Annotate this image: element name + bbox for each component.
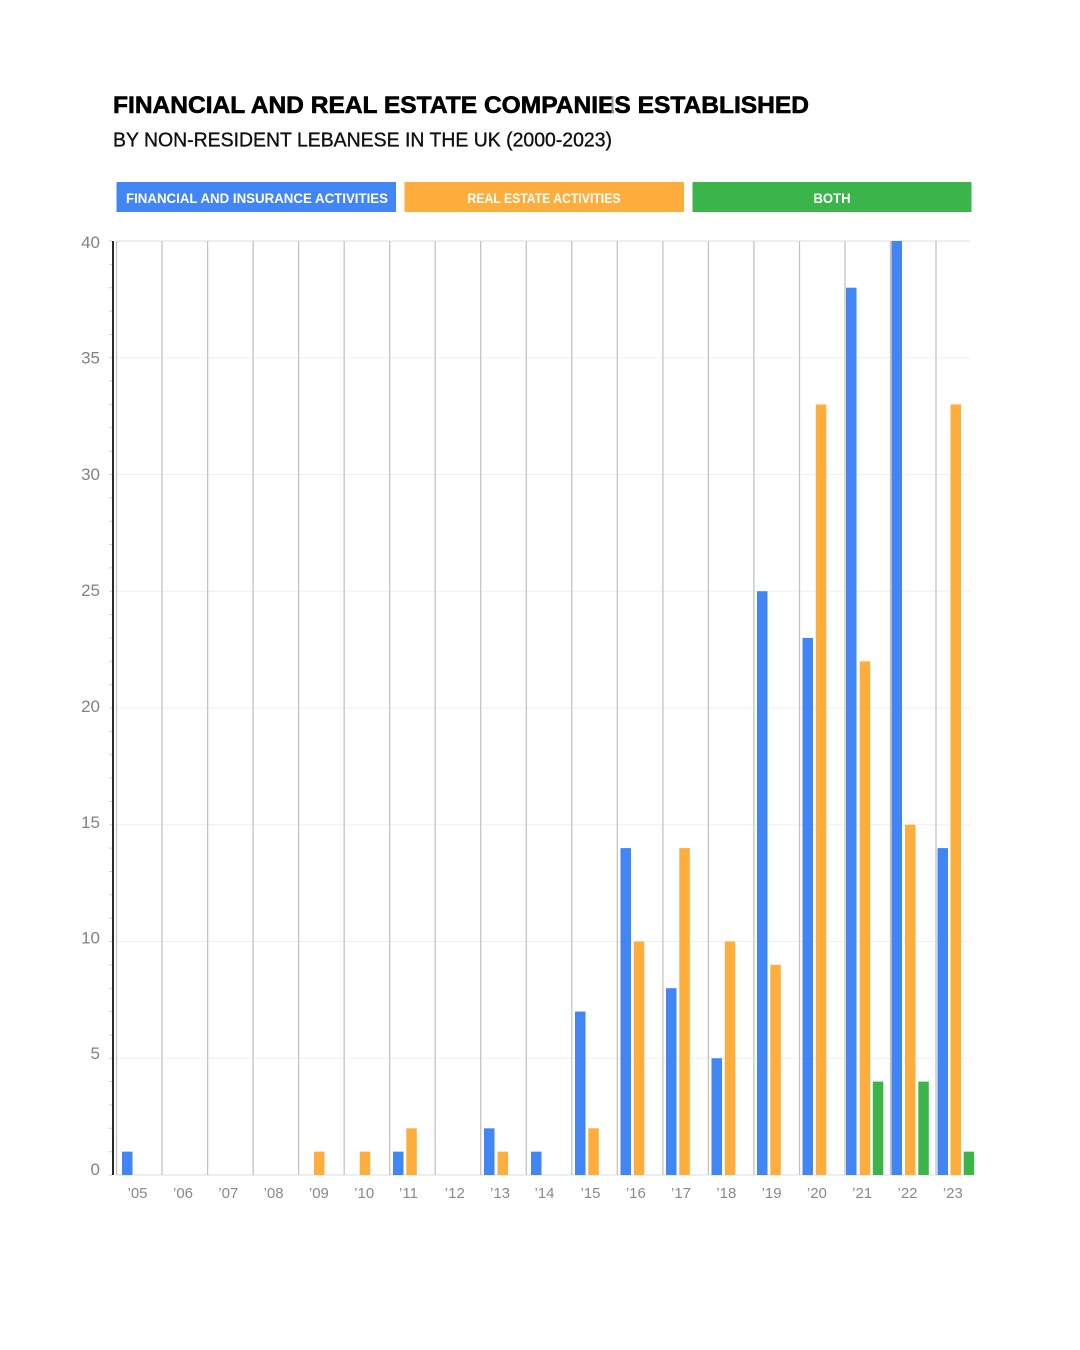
bars: 2013 xyxy=(484,1128,508,1175)
bars: 2016 xyxy=(620,848,644,1175)
x axis labels: ’18 xyxy=(716,1185,736,1202)
x axis labels: ’13 xyxy=(490,1185,510,1202)
x axis labels: ’19 xyxy=(762,1185,782,1202)
x axis labels xyxy=(127,1185,963,1202)
x axis labels: ’05 xyxy=(127,1185,148,1202)
bars: 2021 xyxy=(846,288,883,1175)
bars: 2011 xyxy=(393,1128,417,1175)
horizontal grid lines xyxy=(116,241,970,1175)
legend: real estate activities: REAL ESTATE ACTIVITIES xyxy=(468,191,620,206)
y axis labels: 35 xyxy=(81,348,100,368)
subtitle: BY NON-RESIDENT LEBANESE IN THE UK (2000-2023) xyxy=(113,130,612,152)
bar chart xyxy=(81,233,974,1202)
title: FINANCIAL AND REAL ESTATE COMPANIES ESTABLISHED xyxy=(113,92,809,119)
y axis labels: 5 xyxy=(91,1044,100,1063)
bars: 2009 xyxy=(314,1152,324,1175)
bars: 2014 xyxy=(531,1152,542,1175)
vertical grid lines xyxy=(116,241,936,1175)
legend: real estate activities xyxy=(404,182,684,212)
y axis labels: 40 xyxy=(81,233,100,252)
y axis labels xyxy=(81,233,100,1179)
title glitch mark xyxy=(612,96,614,113)
x axis labels: ’20 xyxy=(807,1185,827,1202)
x axis labels: ’11 xyxy=(399,1185,418,1202)
y axis labels: 10 xyxy=(81,928,100,948)
x axis labels: ’22 xyxy=(897,1185,918,1202)
x axis labels: ’07 xyxy=(218,1185,238,1202)
legend: financial and insurance activities: FINANCIAL AND INSURANCE ACTIVITIES xyxy=(126,191,388,206)
bars: 2018 xyxy=(712,942,735,1175)
bars: 2005 xyxy=(122,1152,132,1175)
legend: both: BOTH xyxy=(814,191,850,206)
x axis labels: ’14 xyxy=(534,1185,555,1202)
y axis labels: 15 xyxy=(81,813,100,832)
y axis labels: 30 xyxy=(81,465,100,484)
bars: 2020 xyxy=(802,404,826,1175)
legend: financial and insurance activities xyxy=(116,182,396,212)
y axis with minor ticks xyxy=(109,241,114,1175)
x axis labels: ’17 xyxy=(671,1185,691,1202)
x axis labels: ’23 xyxy=(943,1185,963,1202)
bars: 2022 xyxy=(892,241,929,1175)
y axis labels: 25 xyxy=(81,581,100,600)
x axis labels: ’10 xyxy=(354,1185,374,1202)
bars: 2015 xyxy=(575,1012,599,1175)
x axis labels: ’21 xyxy=(852,1185,872,1202)
y axis labels: 0 xyxy=(91,1160,100,1179)
bars: 2017 xyxy=(666,848,690,1175)
legend: both xyxy=(692,182,972,212)
x axis labels: ’08 xyxy=(264,1185,284,1202)
x axis labels: ’12 xyxy=(445,1185,465,1202)
bars: 2019 xyxy=(757,591,781,1175)
x axis labels: ’15 xyxy=(580,1185,601,1202)
legend xyxy=(116,182,972,212)
bars: 2023 xyxy=(938,404,974,1175)
x axis labels: ’06 xyxy=(173,1185,193,1202)
x axis labels: ’16 xyxy=(626,1185,646,1202)
x axis labels: ’09 xyxy=(309,1185,329,1202)
y axis labels: 20 xyxy=(81,697,100,716)
bars: 2010 xyxy=(360,1152,370,1175)
